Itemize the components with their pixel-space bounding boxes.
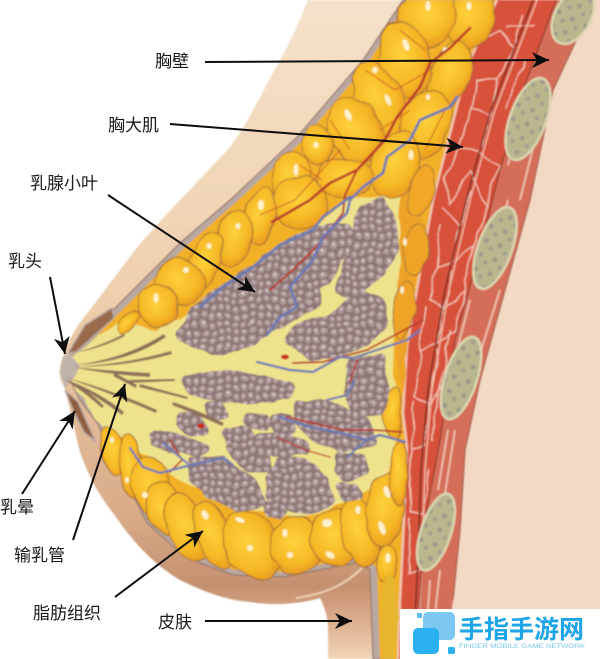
fold highlight bbox=[296, 568, 362, 598]
chest back peach area bbox=[440, 0, 600, 659]
arrow: milk duct bbox=[73, 384, 125, 540]
arteries bbox=[170, 28, 470, 472]
rib 2 bbox=[496, 72, 560, 166]
areola lower bbox=[65, 390, 96, 442]
middle gland bbox=[290, 296, 381, 357]
muscle edge highlight bbox=[398, 0, 497, 659]
label: pectoralis major: 胸大肌 bbox=[108, 116, 159, 135]
rib 3 bbox=[464, 202, 526, 294]
arrow: chest wall bbox=[205, 60, 549, 62]
small gland clusters bbox=[268, 503, 282, 515]
muscle layers bbox=[398, 0, 595, 659]
horizontal central gland bbox=[188, 375, 290, 399]
veins bbox=[130, 97, 457, 473]
rib 1 bbox=[543, 0, 600, 51]
logo subtitle: FINGER MOBILE GAME NETWORK bbox=[459, 643, 586, 650]
label: nipple: 乳头 bbox=[8, 252, 42, 271]
nipple bbox=[60, 354, 80, 388]
fat lobules upper bbox=[112, 0, 503, 339]
upper large gland bbox=[182, 228, 347, 349]
red duct spots bbox=[197, 354, 289, 428]
inner muscle layer bbox=[398, 0, 595, 659]
lower right gland bbox=[299, 405, 370, 447]
grey fascia capsule bbox=[66, 0, 500, 659]
arrow: nipple bbox=[50, 277, 65, 354]
arrow: mammary lobules bbox=[108, 195, 255, 292]
ribs bbox=[409, 0, 600, 575]
arrow: fat tissue bbox=[115, 531, 203, 597]
rib 5 bbox=[409, 489, 463, 575]
milk ducts bbox=[64, 334, 224, 426]
arrow: pectoralis major bbox=[170, 124, 463, 147]
mammary gland lobules bbox=[153, 203, 394, 515]
outer muscle layer bbox=[415, 0, 595, 659]
lower central gland bbox=[269, 461, 330, 511]
label: milk duct: 输乳管 bbox=[14, 546, 65, 565]
arrow: areola bbox=[22, 411, 75, 494]
label: areola: 乳晕 bbox=[0, 498, 34, 517]
label: skin: 皮肤 bbox=[158, 613, 192, 632]
right side gland bbox=[348, 360, 382, 411]
lower left gland bbox=[193, 461, 259, 507]
muscle fibre web bbox=[408, 15, 535, 575]
arrow: skin bbox=[205, 620, 352, 622]
logo icon bbox=[413, 612, 455, 654]
fat lobules lower bbox=[96, 385, 409, 659]
fat highlights bbox=[110, 1, 472, 563]
orange fat beside glands bbox=[394, 160, 428, 395]
fascia lines bbox=[413, 0, 533, 659]
fat internal red veinlets bbox=[260, 30, 445, 215]
watermark logo panel bbox=[400, 609, 600, 659]
logo title: 手指手游网 bbox=[459, 616, 584, 644]
rib 4 bbox=[432, 332, 490, 424]
skin layer bbox=[60, 0, 500, 659]
upper right gland bbox=[340, 203, 394, 294]
areola upper bbox=[68, 308, 114, 353]
label: fat tissue: 脂肪组织 bbox=[33, 604, 101, 623]
label: chest wall: 胸壁 bbox=[155, 52, 189, 71]
pale connective tissue bbox=[70, 195, 402, 520]
fat tissue base bbox=[70, 0, 500, 659]
label: mammary lobules: 乳腺小叶 bbox=[30, 174, 98, 193]
